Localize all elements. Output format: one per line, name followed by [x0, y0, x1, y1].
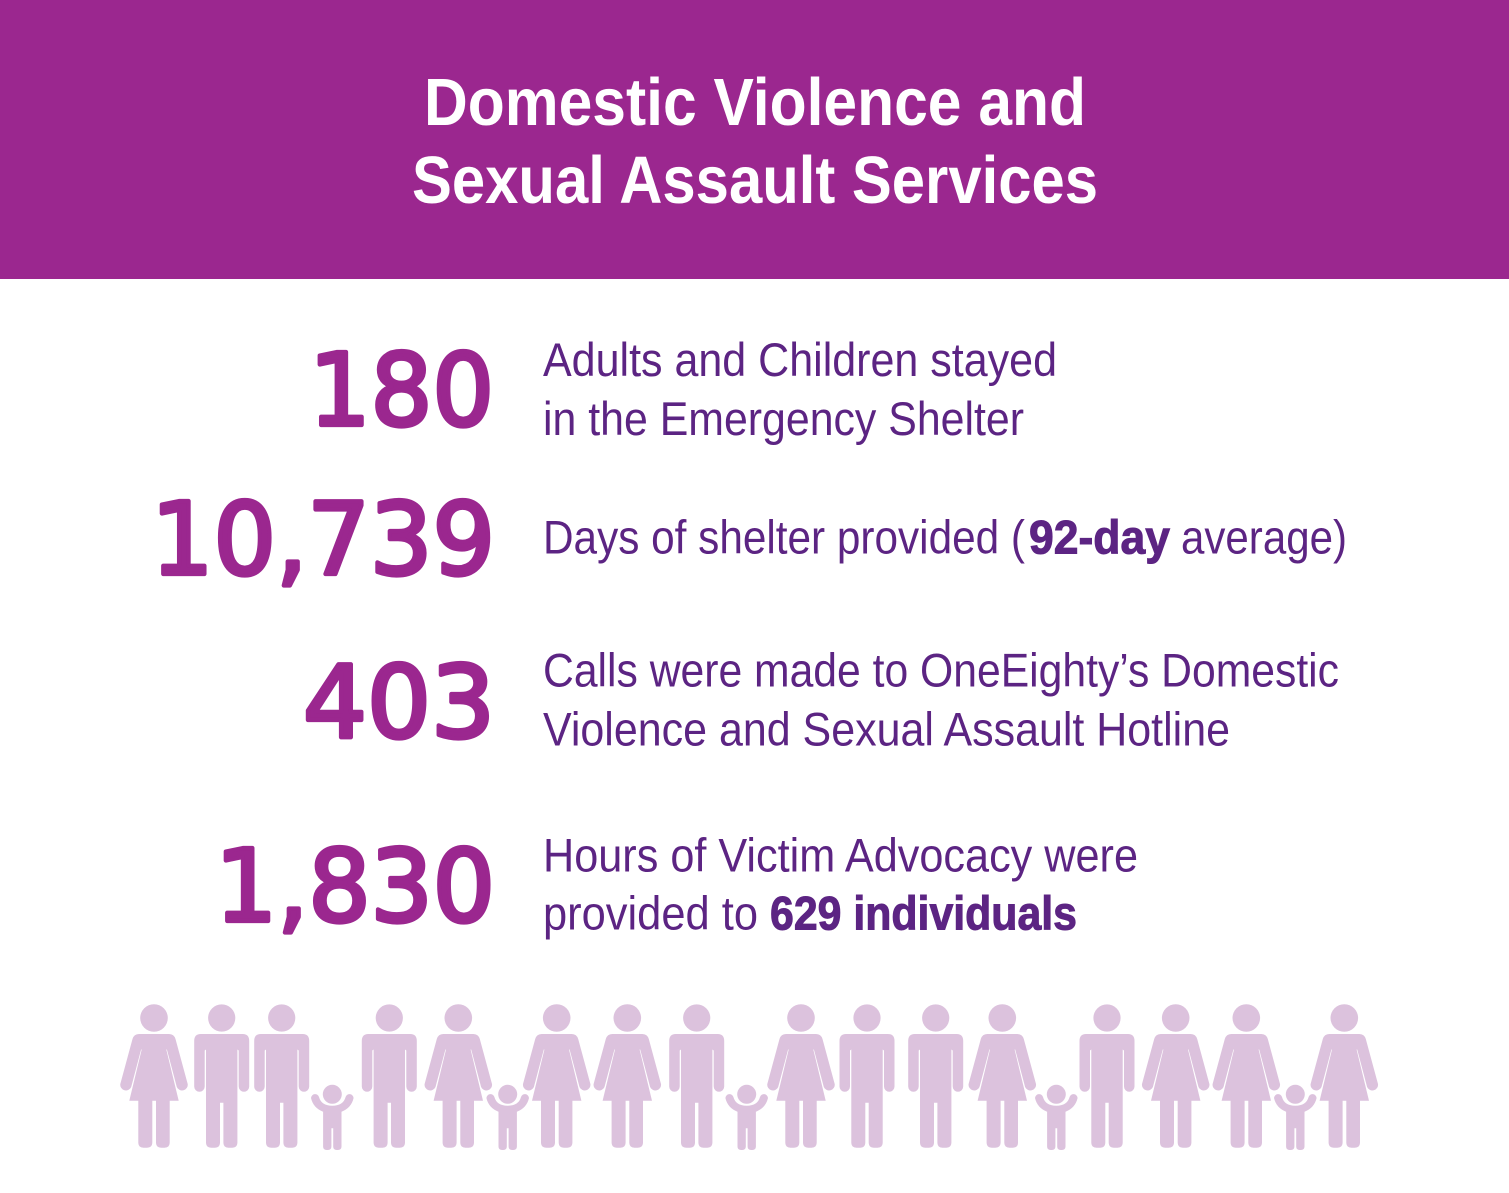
description: emergency shelter: Adults and Children stayed	[543, 334, 1057, 387]
description: days of shelter	[543, 512, 1347, 564]
description: victim advocacy: provided to	[543, 888, 758, 940]
header banner	[0, 0, 1509, 279]
number: 403: 403	[303, 644, 495, 761]
description: hotline calls: Calls were made to OneEighty’s Domestic	[543, 644, 1339, 698]
description: hotline calls	[543, 644, 1339, 756]
description: emergency shelter: in the Emergency Shelter	[543, 393, 1024, 446]
description: days of shelter: average)	[1181, 512, 1347, 564]
stat: 1,830 advocacy hours	[215, 828, 1138, 945]
description: emergency shelter	[543, 334, 1057, 446]
description: hotline calls: Violence and Sexual Assault Hotline	[543, 704, 1230, 756]
description: victim advocacy: 629 individuals	[770, 888, 1077, 940]
title: Sexual Assault Services	[412, 143, 1098, 218]
number: 180: 180	[309, 332, 494, 449]
title: Domestic Violence and	[424, 65, 1086, 140]
description: victim advocacy: Hours of Victim Advocacy were	[543, 830, 1138, 882]
description: victim advocacy	[543, 830, 1138, 940]
stat: 403 hotline calls	[303, 644, 1339, 761]
stat: 180 people in shelter	[309, 332, 1057, 449]
number: 10,739: 10,739	[151, 481, 495, 598]
icon row: silhouettes of women, men and children	[120, 1004, 1378, 1150]
stat: 10,739 shelter days	[151, 481, 1347, 598]
description: days of shelter: Days of shelter provided (	[543, 512, 1025, 564]
title	[412, 65, 1098, 218]
number: 1,830: 1,830	[215, 828, 495, 945]
description: days of shelter: 92-day	[1029, 512, 1171, 564]
